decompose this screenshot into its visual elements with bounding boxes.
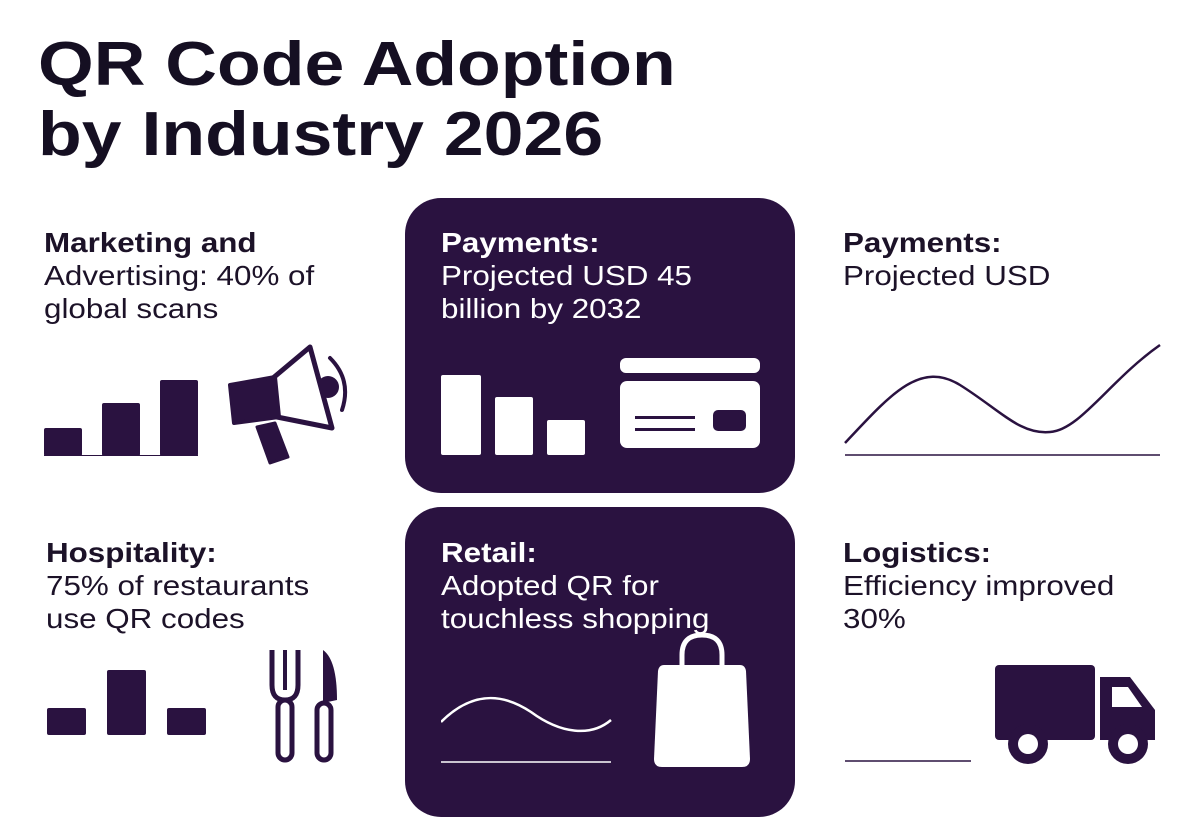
text: hospitality: Hospitality: (46, 537, 217, 568)
text: hospitality (46, 537, 309, 634)
text: payments (441, 227, 692, 324)
chart: hospitality bars (47, 670, 206, 735)
text: retail (441, 537, 710, 634)
icon: truck (995, 665, 1155, 764)
text: payments right: Projected USD (843, 260, 1050, 291)
text: hospitality: 75% of restaurants (46, 570, 309, 601)
text: logistics (843, 537, 1114, 634)
text: hospitality: use QR codes (46, 603, 245, 634)
text: retail: Retail: (441, 537, 537, 568)
text: logistics: Logistics: (843, 537, 991, 568)
title: QR Code Adoption (38, 30, 676, 99)
panel: retail (405, 507, 795, 817)
text: payments: billion by 2032 (441, 293, 642, 324)
icon: shopping bag (654, 632, 750, 767)
chart: marketing bars (44, 380, 198, 456)
text: marketing: Advertising: 40% of (44, 260, 314, 291)
title: by Industry 2026 (38, 100, 603, 169)
text: retail: touchless shopping (441, 603, 710, 634)
text: payments: Payments: (441, 227, 600, 258)
title (38, 30, 676, 169)
text: logistics: 30% (843, 603, 906, 634)
panel: payments (405, 198, 795, 493)
icon: fork and knife (270, 650, 337, 762)
text: marketing: Marketing and (44, 227, 257, 258)
chart: payments line (844, 344, 1161, 456)
chart: payments bars (441, 375, 585, 455)
text: logistics: Efficiency improved (843, 570, 1114, 601)
text: payments right (843, 227, 1050, 291)
text: payments right: Payments: (843, 227, 1002, 258)
line: logistics (845, 760, 971, 762)
text: marketing (44, 227, 314, 324)
text: marketing: global scans (44, 293, 218, 324)
icon: credit card (620, 358, 760, 448)
chart: retail wave (441, 696, 612, 763)
icon: megaphone (228, 344, 348, 464)
text: payments: Projected USD 45 (441, 260, 692, 291)
text: retail: Adopted QR for (441, 570, 659, 601)
